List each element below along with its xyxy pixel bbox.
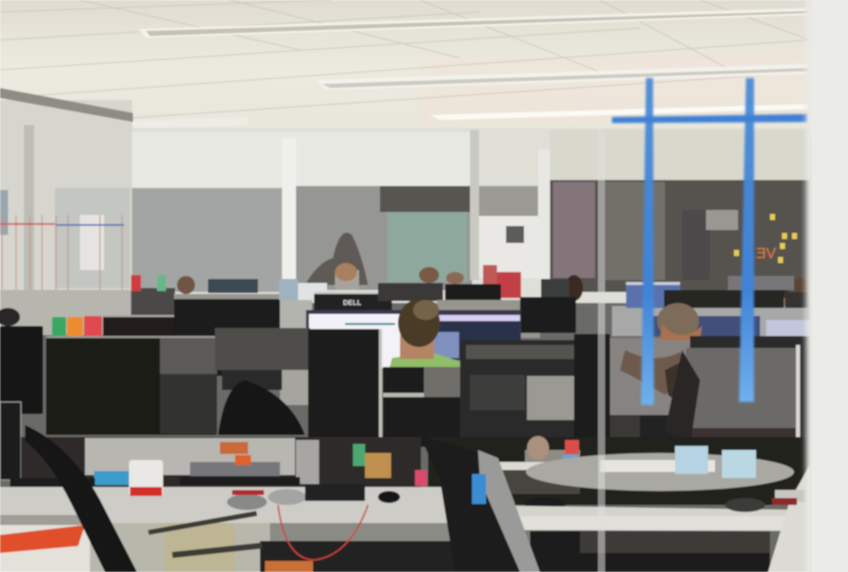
- sticky notes: [734, 214, 797, 263]
- coffee mug: [129, 460, 163, 496]
- mid monitors row: [52, 275, 810, 405]
- blue marks on glass: [612, 78, 808, 405]
- reflection strip on glass: [598, 130, 605, 572]
- reversed wall text: VE: [756, 245, 776, 262]
- large foreground monitors: [0, 326, 810, 480]
- ceiling: [0, 0, 848, 156]
- right man: [610, 303, 702, 446]
- Dell monitor: DELL: [343, 300, 362, 307]
- Dell monitor: [314, 292, 392, 312]
- mice and keyboard on the desk: [227, 484, 765, 512]
- back wall: [0, 88, 810, 335]
- foreground chairs: [25, 425, 540, 572]
- desk area clutter: [10, 436, 810, 513]
- frosted glass band at right: [806, 0, 848, 572]
- central man: [388, 299, 462, 374]
- white desk and lower area: [0, 460, 810, 572]
- colour tabs: [52, 275, 166, 344]
- center bright monitor: [306, 310, 521, 368]
- background workers: [0, 233, 809, 326]
